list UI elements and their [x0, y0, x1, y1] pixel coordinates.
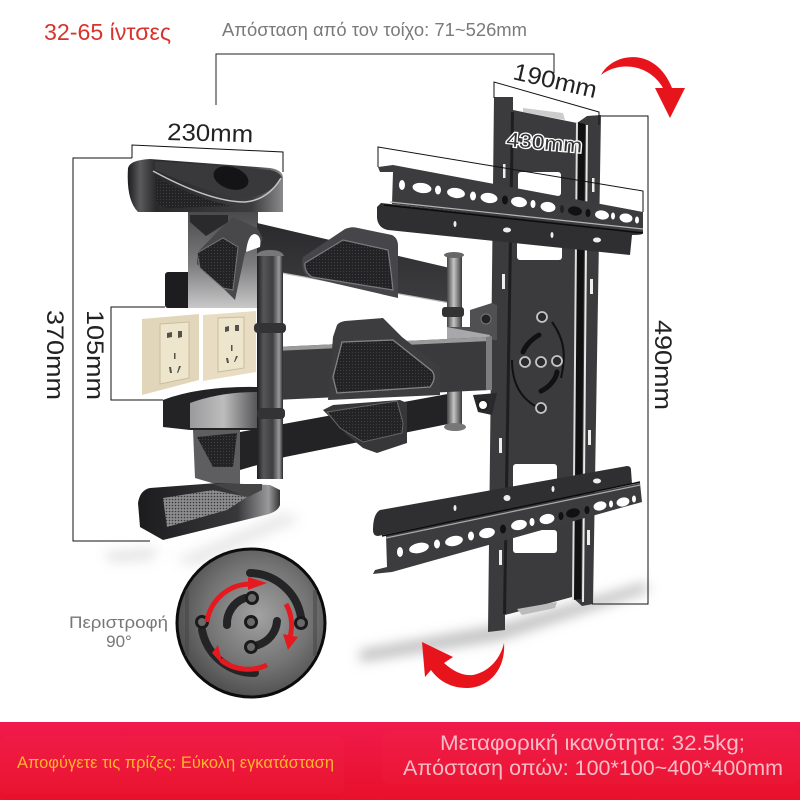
- dimension line: 230mm: [132, 145, 283, 172]
- upper bar flange: [377, 203, 643, 255]
- plate windows: [513, 172, 562, 553]
- banner note: Αποφύγετε τις πρίζες: Εύκολη εγκατάσταση: [17, 753, 334, 772]
- label: wall distance: Απόσταση από τον τοίχο: 71~526mm: [222, 20, 527, 40]
- banner inner panels: [0, 736, 344, 794]
- upper arm pad: [305, 240, 393, 290]
- dimension line: 190mm: [494, 82, 599, 125]
- lower main cover: [328, 318, 440, 400]
- banner capacity: Μεταφορική ικανότητα: 32.5kg;: [440, 732, 745, 755]
- pivot bracket loop: [473, 393, 497, 415]
- disc slots: [202, 573, 301, 673]
- label: 370mm: 370mm: [41, 310, 68, 400]
- pivot bracket: [447, 303, 497, 340]
- plate keyholes: [499, 164, 594, 565]
- tube collar upper: [254, 323, 286, 333]
- lower main arm: [275, 337, 490, 400]
- swing arm assembly: [112, 159, 497, 540]
- disc screws: [196, 592, 306, 652]
- plate rail stripe: [573, 122, 585, 600]
- wall bracket plate: [165, 272, 201, 308]
- upper wall post: [188, 212, 258, 308]
- socket panel backdrop: [112, 308, 257, 400]
- dimension line: 490mm: [592, 116, 648, 604]
- tube collar lower: [257, 408, 285, 419]
- label: 230mm: 230mm: [167, 119, 254, 148]
- rotation detail disc: [177, 549, 325, 697]
- arrow: bottom rotation: [422, 642, 504, 688]
- disc side rails: [185, 590, 189, 656]
- upper arm: [257, 223, 450, 303]
- lower horizontal bar: [373, 466, 642, 574]
- plate centre mount: [512, 312, 564, 413]
- banner hole spacing: Απόσταση οπών: 100*100~400*400mm: [403, 757, 783, 780]
- dimension line: 430mm: [378, 147, 643, 212]
- plate bottom tab: [517, 602, 557, 615]
- socket: right: [203, 311, 256, 381]
- floor shadows: [105, 512, 647, 662]
- upper small cover: [197, 217, 262, 300]
- disc red arrows: [207, 584, 292, 669]
- label: rotation: 90°: [106, 632, 132, 651]
- label: 105mm: 105mm: [81, 310, 108, 400]
- label: rotation: [69, 613, 168, 651]
- socket: left: [142, 314, 199, 395]
- bottom joint: [138, 483, 280, 540]
- lower small cover: [193, 430, 240, 487]
- label: 490mm: 490mm: [649, 320, 676, 410]
- upper bar channel: [378, 165, 643, 232]
- lower arm back: [240, 393, 453, 470]
- dimension line: wall distance: [216, 54, 554, 105]
- dimension line: 105mm: [111, 307, 165, 400]
- heading: size range: 32-65 ίντσες: [44, 19, 171, 45]
- lower under cover: [323, 400, 407, 453]
- label: 190mm: 190mm: [511, 59, 600, 104]
- arrow: top rotation: [601, 57, 685, 118]
- lower bar flange: [373, 466, 632, 536]
- lower arm pin: [442, 252, 466, 431]
- main vertical tube: [254, 250, 286, 479]
- lower cover pad: [333, 340, 434, 393]
- top joint: [128, 159, 283, 212]
- bottom banner: [0, 722, 800, 800]
- upper horizontal bar: [377, 165, 643, 255]
- upper arm cover: [302, 227, 398, 298]
- plate top tab: [523, 108, 565, 120]
- label: 430mm: 430mm: [506, 129, 583, 158]
- dimension line: 370mm: [73, 158, 150, 541]
- lower bar channel: [373, 483, 642, 574]
- label: rotation: Περιστροφή: [69, 613, 168, 632]
- lower wall post: [163, 387, 257, 430]
- top joint pad: [156, 177, 232, 208]
- vertical wall plate: [488, 97, 601, 632]
